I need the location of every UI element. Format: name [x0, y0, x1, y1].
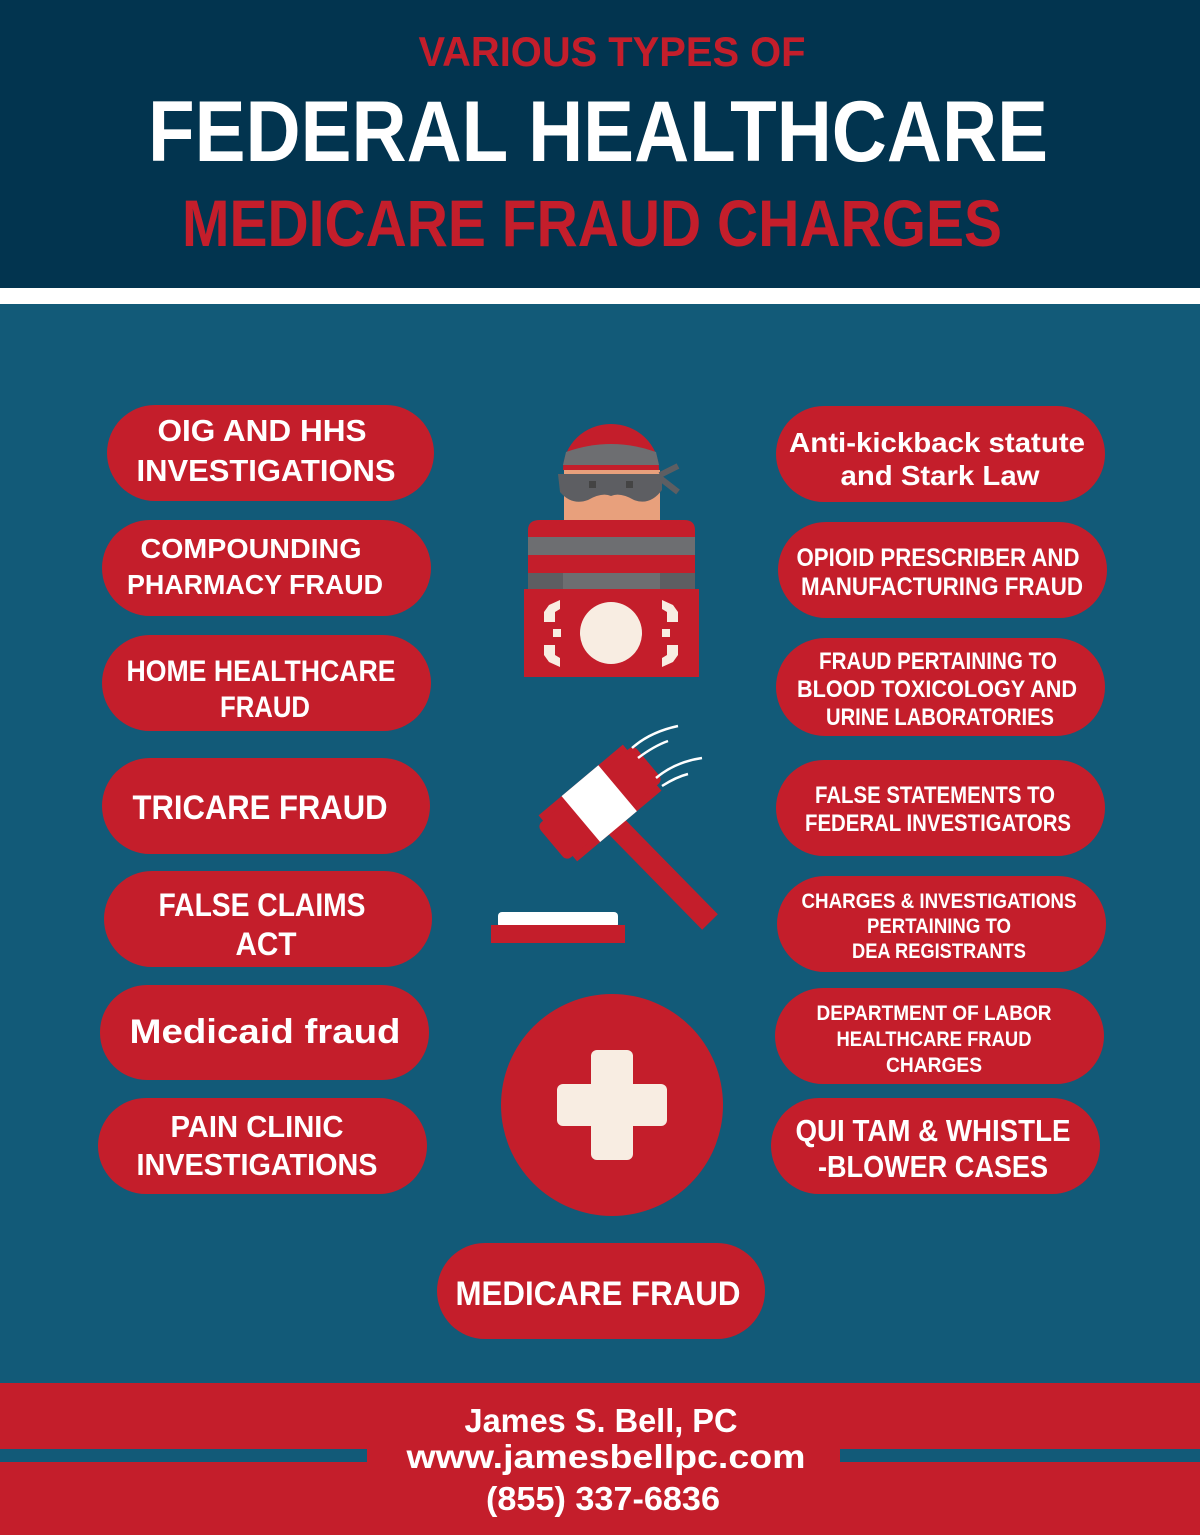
- pill: compounding: PHARMACY FRAUD: [127, 569, 383, 600]
- pill: home healthcare: HOME HEALTHCARE: [126, 655, 396, 688]
- pill: DEA: PERTAINING TO: [867, 915, 1011, 938]
- pill: qui tam: [771, 1098, 1100, 1194]
- pill: DEA: [777, 876, 1106, 972]
- pill: opioid: OPIOID PRESCRIBER AND: [796, 544, 1080, 572]
- title line 2: FEDERAL HEALTHCARE: [148, 84, 1048, 180]
- pill: toxicology: [776, 638, 1105, 736]
- pill: anti-kickback: and Stark Law: [840, 460, 1040, 491]
- pill: pain clinic: [98, 1098, 427, 1194]
- pill: false claims: ACT: [236, 926, 297, 962]
- pill: DEA: DEA REGISTRANTS: [852, 940, 1026, 963]
- footer: firm name: James S. Bell, PC: [464, 1402, 738, 1439]
- title line 3: MEDICARE FRAUD CHARGES: [182, 186, 1002, 260]
- footer: [0, 1383, 1200, 1535]
- pill: anti-kickback: [776, 406, 1105, 502]
- pill: pain clinic: PAIN CLINIC: [170, 1109, 344, 1144]
- pill: medicare fraud: [437, 1243, 765, 1339]
- pill: qui tam: -BLOWER CASES: [818, 1149, 1048, 1184]
- pill: toxicology: BLOOD TOXICOLOGY AND: [797, 676, 1077, 703]
- pill: tricare: [102, 758, 430, 854]
- footer: website: www.jamesbellpc.com: [405, 1438, 806, 1475]
- pill: dept of labor: [775, 988, 1104, 1084]
- pill: OIG and HHS: [107, 405, 434, 501]
- title line 1: VARIOUS TYPES OF: [418, 28, 806, 75]
- pill: opioid: [778, 522, 1107, 618]
- pill: qui tam: QUI TAM & WHISTLE: [796, 1113, 1070, 1148]
- pill: false claims: FALSE CLAIMS: [158, 887, 366, 923]
- pill: false statements: [776, 760, 1105, 856]
- pill: home healthcare: FRAUD: [220, 691, 310, 724]
- pill: medicare fraud: MEDICARE FRAUD: [456, 1275, 740, 1313]
- pill: false statements: FALSE STATEMENTS TO: [815, 782, 1055, 809]
- pill: false statements: FEDERAL INVESTIGATORS: [805, 810, 1071, 837]
- pill: compounding: COMPOUNDING: [140, 533, 362, 564]
- pill: medicaid: Medicaid fraud: [130, 1013, 400, 1051]
- pill: OIG and HHS: OIG AND HHS: [158, 413, 366, 448]
- pill: tricare: TRICARE FRAUD: [132, 789, 388, 827]
- icon: gavel: [491, 726, 710, 943]
- pill: false claims: [104, 871, 432, 967]
- pill: toxicology: URINE LABORATORIES: [826, 704, 1054, 731]
- pill: pain clinic: INVESTIGATIONS: [136, 1147, 378, 1182]
- icon: robber with money: [524, 424, 699, 677]
- pill: anti-kickback: Anti-kickback statute: [789, 427, 1085, 458]
- pill: opioid: MANUFACTURING FRAUD: [801, 573, 1083, 601]
- pill: medicaid: [100, 985, 429, 1080]
- footer: phone: (855) 337-6836: [486, 1480, 720, 1517]
- pill: compounding: [102, 520, 431, 616]
- pill: toxicology: FRAUD PERTAINING TO: [819, 648, 1057, 675]
- icon: medical cross circle: [501, 994, 723, 1216]
- pill: dept of labor: CHARGES: [886, 1054, 982, 1077]
- pill: OIG and HHS: INVESTIGATIONS: [136, 453, 396, 488]
- pill: home healthcare: [102, 635, 431, 731]
- pill: dept of labor: HEALTHCARE FRAUD: [836, 1028, 1032, 1051]
- pill: dept of labor: DEPARTMENT OF LABOR: [816, 1002, 1052, 1025]
- header: [0, 0, 1200, 304]
- pill: DEA: CHARGES & INVESTIGATIONS: [802, 890, 1076, 913]
